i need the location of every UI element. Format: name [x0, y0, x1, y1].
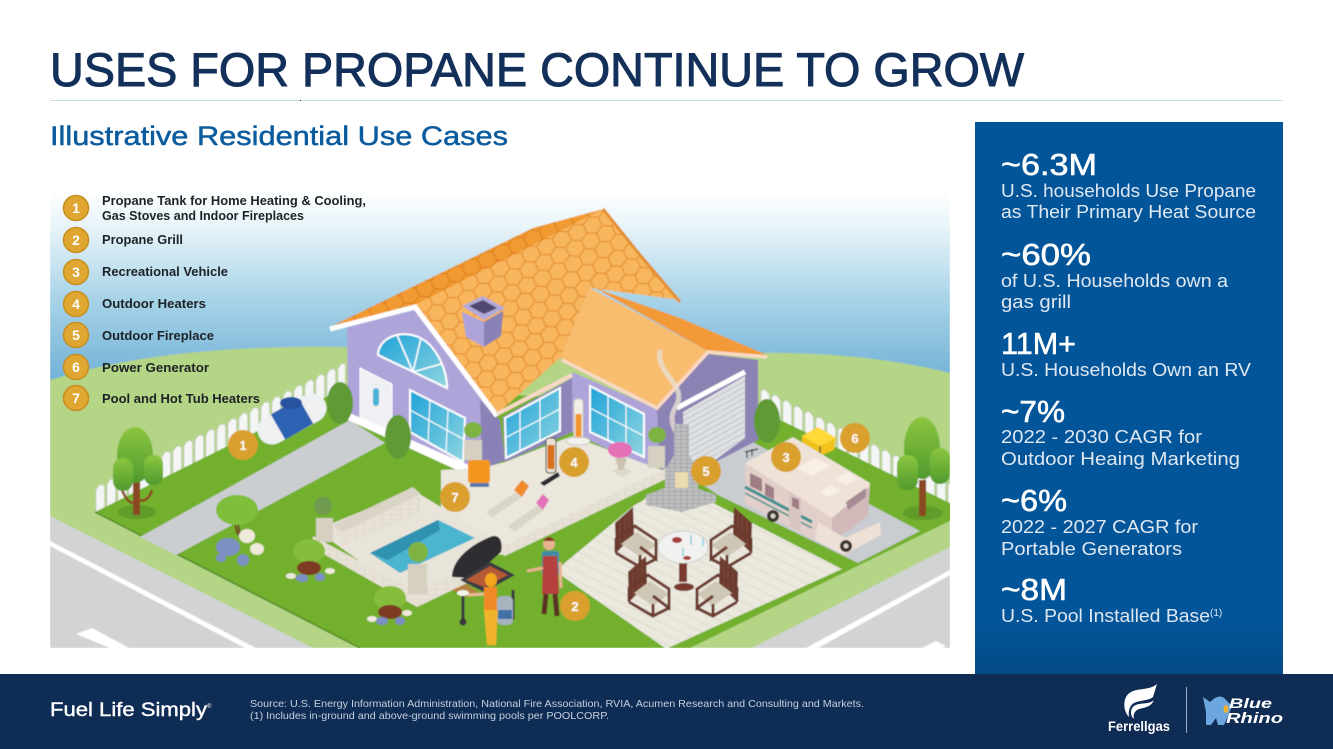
stat: pool installed base: U.S. Pool Installed Base — [1001, 606, 1210, 626]
right tree — [897, 417, 950, 520]
heaters — [468, 399, 590, 487]
generator — [802, 427, 836, 456]
legend item 7: Pool and Hot Tub Heaters — [102, 392, 260, 406]
deck — [555, 498, 842, 648]
numbered callouts on scene: 7 — [451, 490, 459, 505]
source note — [250, 698, 864, 722]
stat: pool installed base: ~8M — [1001, 572, 1067, 607]
footer band — [0, 674, 1333, 749]
house walls — [347, 310, 758, 476]
tagline: ® — [207, 703, 212, 710]
recreational vehicle — [745, 437, 881, 555]
stat: RV ownership: 11M+ — [1001, 326, 1076, 361]
stat: portable generators CAGR — [1001, 483, 1198, 559]
legend item 5 — [64, 322, 214, 348]
source note: Source: U.S. Energy Information Administration, National Fire Association, RVIA, Acumen Research and Consulting and Markets. — [250, 698, 864, 710]
logo: Ferrellgas — [1108, 684, 1170, 734]
chimney — [462, 296, 505, 347]
stat: gas grill — [1001, 237, 1229, 312]
patio — [441, 436, 668, 561]
stat: gas grill: gas grill — [1001, 292, 1071, 312]
numbered callouts on scene: 3 — [782, 450, 790, 465]
stat: RV ownership — [1001, 326, 1251, 380]
legend item 2: 2 — [72, 232, 80, 248]
potted plants — [286, 539, 412, 625]
stat: gas grill: of U.S. Households own a — [1001, 271, 1229, 291]
windows and door — [360, 334, 644, 462]
garage door — [683, 376, 745, 475]
title: USES FOR PROPANE CONTINUE TO GROW — [50, 43, 1025, 96]
fences — [95, 362, 950, 513]
fireplace — [646, 424, 716, 512]
legend item 6 — [64, 354, 209, 380]
legend item 1: Gas Stoves and Indoor Fireplaces — [102, 209, 304, 223]
legend item 3: Recreational Vehicle — [102, 265, 228, 279]
stat: outdoor heating CAGR: Outdoor Heaing Marketing — [1001, 449, 1240, 469]
legend item 4: Outdoor Heaters — [102, 297, 206, 311]
legend item 3 — [64, 260, 228, 284]
numbered callouts on scene: 4 — [570, 455, 578, 470]
stat: RV ownership: U.S. Households Own an RV — [1001, 360, 1251, 380]
lounge chairs — [486, 480, 549, 532]
left road — [50, 516, 313, 648]
legend item 2: Propane Grill — [102, 233, 183, 247]
left tree — [113, 427, 163, 519]
stat: primary heat source: U.S. households Use Propane — [1001, 181, 1256, 201]
legend item 6: Power Generator — [102, 361, 209, 375]
legend item 1: Propane Tank for Home Heating & Cooling, — [102, 194, 366, 208]
propane tank — [272, 397, 312, 430]
numbered callouts on scene — [228, 423, 870, 621]
legend — [64, 194, 366, 410]
legend item 1: 1 — [72, 200, 80, 216]
numbered callouts on scene: 1 — [239, 438, 247, 453]
stat: pool installed base — [1001, 572, 1222, 626]
logo: Ferrellgas: Ferrellgas — [1108, 718, 1170, 734]
legend item 6: 6 — [72, 359, 80, 375]
legend item 5: Outdoor Fireplace — [102, 329, 214, 343]
roof — [330, 209, 767, 416]
stat: primary heat source — [1001, 147, 1256, 222]
source note: (1) Includes in-ground and above-ground swimming pools per POOLCORP. — [250, 710, 609, 722]
main lawn — [95, 385, 968, 648]
patio furniture — [615, 507, 752, 616]
subheading: Illustrative Residential Use Cases — [50, 121, 508, 151]
right road — [752, 547, 950, 648]
stat: primary heat source: ~6.3M — [1001, 147, 1097, 182]
patio planters — [464, 422, 666, 477]
stat: outdoor heating CAGR: 2022 - 2030 CAGR for — [1001, 427, 1202, 447]
man at grill — [527, 537, 561, 616]
small tree and rocks — [216, 495, 264, 566]
stat: portable generators CAGR: ~6% — [1001, 483, 1067, 518]
legend item 3: 3 — [72, 264, 80, 280]
tagline: Fuel Life Simply — [50, 700, 208, 721]
legend item 4 — [64, 292, 206, 316]
logo: Blue Rhino: Rhino — [1226, 710, 1283, 727]
stat: outdoor heating CAGR: ~7% — [1001, 394, 1065, 429]
driveway — [140, 420, 385, 555]
panel: key statistics — [975, 122, 1283, 674]
logo: Blue Rhino: Blue — [1229, 695, 1272, 711]
stat: pool installed base: (1) — [1210, 608, 1222, 619]
bushes — [327, 382, 780, 459]
woman at grill — [457, 573, 498, 645]
legend item 2 — [64, 228, 183, 252]
logo: Blue Rhino — [1203, 695, 1283, 727]
legend item 5: 5 — [72, 327, 80, 343]
sky — [50, 190, 950, 385]
background hills — [50, 347, 950, 648]
pool enclosure — [313, 487, 495, 607]
legend item 7: 7 — [72, 390, 80, 406]
stat: gas grill: ~60% — [1001, 237, 1091, 272]
numbered callouts on scene: 6 — [851, 431, 859, 446]
legend item 7 — [64, 386, 260, 410]
RV pad — [704, 442, 920, 564]
stat: portable generators CAGR: Portable Generators — [1001, 539, 1182, 559]
numbered callouts on scene: 5 — [702, 464, 710, 479]
illustration: residential propane use scene — [50, 190, 968, 648]
numbered callouts on scene: 2 — [571, 599, 579, 614]
stat: outdoor heating CAGR — [1001, 394, 1240, 469]
stat: portable generators CAGR: 2022 - 2027 CAGR for — [1001, 517, 1198, 537]
grill — [452, 536, 515, 626]
legend item 1 — [64, 194, 366, 223]
stat: primary heat source: as Their Primary Heat Source — [1001, 202, 1256, 222]
legend item 4: 4 — [72, 296, 80, 312]
smoke — [660, 350, 680, 440]
